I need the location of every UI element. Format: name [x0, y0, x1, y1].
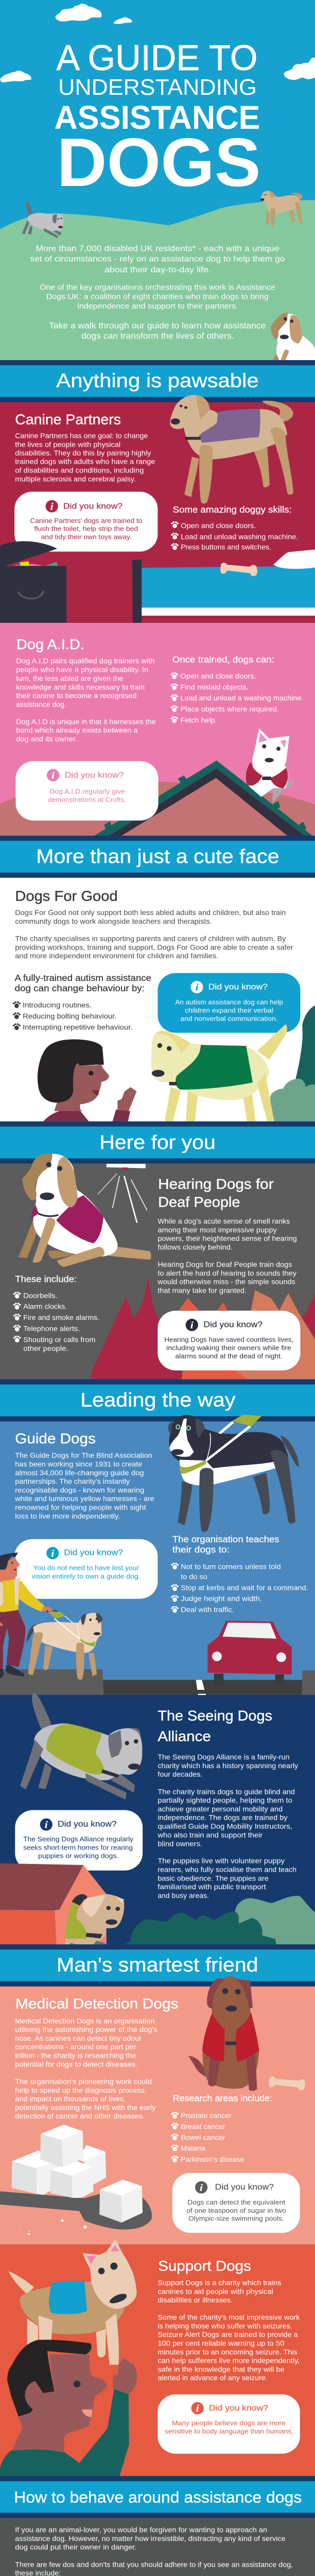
callout: did you know: i [50, 501, 54, 512]
text block: Medical Detection Dogs is an organisation [15, 2018, 155, 2025]
list: research areas: Malaria [181, 2145, 205, 2153]
callout: did you know: Did you know? [208, 982, 268, 991]
callout: did you know: Did you know? [215, 2182, 274, 2192]
text block: partnerships. The charity's instantly [15, 1478, 130, 1486]
callout: did you know: An autism assistance dog can help [175, 998, 283, 1006]
icon: grey dog [22, 202, 64, 238]
text block: recognisable dogs - known for wearing [15, 1487, 144, 1495]
text block: Dogs For Good not only support both less abled adults and children, but also train [15, 909, 286, 917]
callout: did you know: Did you know? [203, 1319, 262, 1329]
callout: did you know: and tidy their own toys away. [41, 533, 132, 540]
text block: concentrations - around one part per [15, 2044, 136, 2051]
title: ASSISTANCE [54, 99, 260, 136]
callout: did you know [14, 1539, 157, 1599]
list: doggy skills: Open and close doors. [181, 522, 256, 530]
text block: The puppies live with volunteer puppy [157, 1858, 285, 1865]
panel: Dogs For Good [0, 878, 315, 1122]
text block: trained dogs with adults who have a range [15, 459, 155, 466]
text block: disabilities or illnesses. [157, 2297, 233, 2304]
text block: independence. The dogs are trained by [157, 1815, 288, 1822]
band: More than just a cute face [0, 836, 315, 878]
icon: toy box [0, 541, 66, 623]
icon: green-vest dog [151, 1024, 287, 1122]
text block: intro: assistance dog. However, no matter how irresistible, distracting any kind of service [15, 2535, 286, 2543]
panel: Support Dogs [0, 2239, 315, 2476]
text block: The Seeing Dogs Alliance is a family-run [157, 1754, 289, 1761]
text block: utilising the astonishing power of the dog's [15, 2026, 157, 2034]
icon: woman with hand raised [0, 2340, 137, 2476]
list: these include [13, 1274, 99, 1353]
text block: renowned for helping people with sight [15, 1504, 147, 1512]
list: behaviour: dog can change behaviour by: [14, 983, 145, 993]
text block: Some of the charity's most impressive work [157, 2314, 300, 2321]
heading: Dog A.I.D. [16, 636, 84, 652]
callout: did you know: Many people believe dogs are more [172, 2419, 286, 2427]
text block: intro: dog could put their owner in danger. [15, 2544, 136, 2551]
callout: did you know: i [51, 770, 55, 781]
callout: did you know: Dog A.I.D regularly give [49, 788, 125, 795]
intro text: Dogs UK: a coalition of eight charities who train dogs to bring [46, 293, 269, 301]
icon: beagle with bandana [19, 1154, 151, 1267]
text block: canines to aid people with physical [157, 2288, 273, 2296]
text block: blind owners. [157, 1840, 202, 1848]
list: these include: Shouting or calls from [23, 1336, 95, 1344]
callout: did you know: and nonverbal communication. [180, 1014, 278, 1022]
callout: did you know: i [196, 2403, 199, 2414]
text block: The charity trains dogs to guide blind and [157, 1788, 295, 1796]
icon: bushes [270, 1006, 315, 1122]
panel: hero [0, 0, 315, 360]
title [54, 38, 261, 200]
band: Here for you: Here for you [99, 1131, 216, 1153]
text block [157, 1754, 299, 1900]
callout: did you know: i [200, 2182, 203, 2193]
band: Man's smartest friend [0, 1944, 315, 1987]
text block: rearers, who fully socialise them and teach [157, 1867, 296, 1874]
callout: did you know: Did you know? [209, 2403, 268, 2413]
text block: Seizure Alert Dogs are trained to provide a [157, 2331, 299, 2339]
panel: Canine Partners [0, 395, 315, 623]
title: A GUIDE TO [56, 38, 257, 78]
heading: The Seeing Dogs [157, 1708, 272, 1724]
text block: of disabilities and conditions, including [15, 467, 144, 474]
text block: follows closely behind. [157, 1244, 233, 1251]
text block: providing workshops, training and support, Dogs For Good are able to create a safer [15, 944, 293, 952]
heading: Medical Detection Dogs [15, 1996, 179, 2012]
intro text [30, 244, 285, 341]
icon: clouds [0, 4, 315, 82]
callout: did you know [14, 492, 157, 552]
panel: Guide Dogs [0, 1415, 315, 1695]
text block: bond which already exists between a [16, 727, 138, 735]
text block: people who have a physical disability. In [16, 667, 148, 674]
callout: did you know: i [190, 1319, 194, 1331]
heading: Alliance [157, 1728, 211, 1744]
heading: Deaf People [158, 1194, 240, 1210]
callout: did you know [157, 1311, 301, 1370]
list: organisation teaches: The organisation teaches [172, 1534, 279, 1544]
panel: Dog A.I.D. [0, 623, 315, 836]
callout: did you know: i [195, 981, 199, 993]
text block [157, 1218, 297, 1295]
title: DOGS [57, 124, 261, 200]
callout: did you know [172, 2173, 300, 2233]
text block: and busy areas. [157, 1892, 209, 1900]
text block: basic obedience. The puppies are [157, 1875, 269, 1883]
text block [157, 2280, 300, 2382]
icon: tan dog [260, 191, 303, 228]
band: Leading the way: Leading the way [80, 1389, 236, 1411]
heading: Hearing Dogs for [158, 1176, 274, 1192]
text block: among their most impressive puppy [157, 1227, 277, 1234]
text block: the lives of people with physical [15, 441, 120, 449]
list: organisation teaches: to do so [181, 1573, 207, 1581]
icon: dog house [94, 760, 312, 836]
band: More than just a cute face: More than just a cute face [36, 845, 279, 867]
intro text: independence and support to their partners. [77, 302, 238, 311]
text block: knowledge and skills necessary to train [16, 684, 145, 691]
text block: The Guide Dogs for The Blind Association [15, 1452, 152, 1460]
panel: Medical Detection Dogs [0, 1976, 315, 2245]
hills [0, 200, 315, 360]
callout: did you know: vision entirely to own a guide dog. [32, 1572, 140, 1580]
text block: almost 34,000 life-changing guide dog [15, 1469, 144, 1477]
band: Here for you [0, 1122, 315, 1164]
icon: woman [38, 1039, 136, 1122]
callout: did you know: Did you know? [64, 1548, 123, 1557]
text block: and more independent environment for children and families. [15, 953, 218, 960]
text block: to alert the hard of hearing to sounds they [157, 1270, 297, 1278]
text block: multiple sclerosis and cerebral palsy. [15, 476, 136, 483]
icon: bone [269, 2077, 305, 2090]
text block: who also train and support their [157, 1832, 262, 1839]
list: organisation teaches: Judge height and width. [181, 1596, 262, 1603]
panel: Hearing Dogs [0, 1154, 315, 1379]
text block: familiarised with public transport [157, 1884, 267, 1891]
callout: did you know: puppies or working dogs. [38, 1852, 118, 1859]
text block: can help sufferers live more independently, [157, 2358, 300, 2365]
list: once trained: Once trained, dogs can: [172, 654, 274, 665]
text block: turn, the less abled are given the [16, 675, 123, 683]
text block: and impact on thousands of lives, [15, 2096, 126, 2103]
panel: how to behave [0, 2518, 315, 2576]
list: research areas: Prostate cancer [181, 2112, 232, 2120]
callout: did you know: sensitive to body language than humans. [165, 2428, 293, 2435]
list: doggy skills [171, 504, 298, 551]
heading: Canine Partners [15, 412, 121, 428]
list: behaviour [13, 973, 151, 1031]
list: behaviour: Interrupting repetitive behaviour. [23, 1024, 133, 1031]
list: once trained: Open and close doors. [180, 673, 256, 681]
text block: partially sighted people, helping them to [157, 1797, 292, 1805]
text block: powers, their heightened sense of hearing [157, 1235, 297, 1243]
icon: smoke alarm [98, 1164, 147, 1223]
callout: did you know: including waking their owners while fire [166, 1344, 291, 1351]
text block: would otherwise miss - the simple sounds [157, 1279, 295, 1286]
text block: safe in the knowledge that they will be [157, 2366, 285, 2374]
callout: did you know: Canine Partners' dogs are trained to [30, 517, 142, 524]
list: research areas [171, 2093, 272, 2164]
heading: Support Dogs [158, 2258, 251, 2274]
callout: did you know [15, 1810, 143, 1871]
icon: grey dog in green vest [20, 1693, 142, 1800]
icon: beagle peeking [271, 313, 315, 360]
text block: help to speed up the diagnosis process [15, 2087, 145, 2095]
icon: white terrier on roof [246, 728, 295, 803]
intro text: set of circumstances - rely on an assistance dog to help them go [30, 254, 285, 263]
callout: did you know: seeks short-term homes for rearing [23, 1844, 133, 1851]
text block: dog and its owner. [16, 736, 77, 743]
band: Man's smartest friend: Man's smartest friend [57, 1954, 258, 1976]
text block [15, 2018, 157, 2121]
band: Anything is pawsable [0, 360, 315, 402]
list: once trained: Find mislaid objects. [180, 684, 249, 691]
icon: bushes [125, 1896, 315, 1944]
text block: community dogs to work alongside teachers and therapists. [15, 918, 212, 926]
text block: intro [15, 2527, 293, 2576]
callout: did you know: The Seeing Dogs Alliance regularly [23, 1835, 134, 1843]
text block: intro: If you are an animal-lover, you would be forgiven for wanting to approach an [15, 2527, 267, 2534]
band: Anything is pawsable: Anything is pawsable [56, 370, 259, 392]
text block: The charity specialises in supporting parents and carers of children with autism. By [15, 935, 286, 943]
callout: did you know: Did you know? [58, 1819, 117, 1828]
list: research areas: Research areas include: [173, 2093, 272, 2103]
icon: flames [91, 1277, 315, 1379]
icon: bed and bone [132, 550, 315, 623]
list: these include: other people. [23, 1345, 68, 1353]
heading [158, 1176, 274, 1210]
list: organisation teaches [171, 1534, 308, 1614]
icon: man head [0, 1552, 20, 1582]
list: these include: Fire and smoke alarms. [23, 1314, 99, 1322]
list: these include: Doorbells. [23, 1292, 58, 1300]
text block [15, 909, 293, 960]
text block: loss to live more independently. [15, 1513, 120, 1520]
callout: did you know: Dogs can detect the equivalent [187, 2198, 285, 2206]
callout: did you know: of one teaspoon of sugar in two [186, 2207, 286, 2214]
panel: The Seeing Dogs Alliance [0, 1693, 315, 1950]
list: organisation teaches: their dogs to: [172, 1545, 230, 1554]
intro text: about their day-to-day life. [104, 265, 211, 274]
list: research areas: Parkinson's disease [181, 2156, 244, 2164]
list: organisation teaches: Deal with traffic. [181, 1606, 234, 1614]
text block: nose. As canines can detect tiny odour [15, 2035, 142, 2043]
icon: red car [207, 1621, 292, 1686]
text block: qualified Guide Dog Mobility Instructors, [157, 1823, 292, 1831]
list: once trained: Place objects where required. [180, 706, 279, 714]
list: once trained: Load and unload a washing machine. [180, 695, 303, 702]
text block: potential for dogs to detect diseases. [15, 2061, 137, 2069]
callout: did you know: children expand their verbal [185, 1006, 273, 1014]
text block: Dog A.I.D pairs qualified dog trainers with [16, 658, 155, 665]
icon: canine partner dog [170, 395, 293, 504]
text block: is helping those who suffer with seizures. [157, 2323, 292, 2330]
list: these include: Telephone alerts. [23, 1325, 80, 1333]
icon: kennel with dog [0, 1863, 124, 1944]
band: How to behave around assistance dogs [0, 2476, 315, 2518]
title: UNDERSTANDING [58, 75, 257, 100]
list: these include: Alarm clocks. [23, 1303, 67, 1311]
list: doggy skills: Press buttons and switches. [181, 544, 271, 551]
callout: did you know [15, 761, 159, 821]
callout: did you know [157, 973, 301, 1033]
text block: The organisation's pioneering work could [15, 2078, 152, 2086]
text block: Dog A.I.D is unique in that it harnesses the [16, 718, 155, 726]
text block: that many take for granted. [157, 1287, 247, 1295]
text block: disabilities. They do this by pairing highly [15, 450, 151, 457]
text block: 100 per cent reliable warning up to 50 [157, 2340, 284, 2348]
list: these include: These include: [15, 1274, 77, 1284]
text block: achieve greater personal mobility and [157, 1806, 283, 1814]
list: organisation teaches: Not to turn corners unless told [181, 1564, 281, 1571]
callout: did you know: demonstrations at Crufts. [48, 796, 126, 803]
intro text: One of the key organisations orchestrating this work is Assistance [40, 283, 275, 292]
icon: guide dog in harness [168, 1415, 299, 1532]
callout: did you know: i [51, 1548, 55, 1559]
text block: potentially assisting the NHS with the early [15, 2104, 156, 2112]
list: research areas: Breast cancer [181, 2123, 225, 2131]
heading: Guide Dogs [15, 1431, 96, 1447]
text block: Canine Partners has one goal: to change [15, 433, 148, 440]
text block [15, 433, 155, 483]
callout: did you know: You do not need to have lost your [33, 1564, 139, 1571]
icon: labrador guide dog [26, 1611, 102, 1680]
callout: did you know [157, 2394, 300, 2454]
text block: Support Dogs is a charity which trains [157, 2280, 281, 2287]
text block: has been working since 1931 to create [15, 1461, 142, 1468]
list: behaviour: Reducing bolting behaviour. [23, 1013, 116, 1021]
text block: charity which has a history spanning nearly [157, 1762, 299, 1770]
icon: sugar cubes on spoon [0, 2125, 152, 2235]
list: behaviour: Introducing routines. [23, 1002, 92, 1009]
callout: did you know: flush the toilet, help strip the bed [34, 525, 138, 532]
callout: did you know: Olympic-size swimming pools. [188, 2215, 284, 2222]
text block: alerted in advance of any seizure. [157, 2375, 268, 2382]
heading [157, 1708, 272, 1744]
list: behaviour: A fully-trained autism assistance [14, 973, 151, 983]
text block: While a dog's acute sense of smell ranks [157, 1218, 290, 1226]
list: research areas: Bowel cancer [181, 2134, 225, 2142]
callout: did you know: i [45, 1819, 48, 1831]
icon: support dog [8, 2239, 136, 2365]
list: doggy skills: Load and unload washing machine. [181, 534, 298, 541]
list: once trained: Fetch help. [180, 717, 217, 724]
text block: minutes prior to an oncoming seizure. This [157, 2349, 297, 2357]
ground hump [0, 782, 315, 836]
text block: their canine to become a recognised [16, 692, 136, 700]
list: doggy skills: Some amazing doggy skills: [173, 504, 292, 515]
text block: assistance dog. [16, 701, 66, 709]
text block [16, 658, 155, 743]
callout: did you know: Did you know? [63, 501, 122, 511]
intro text: dogs can transform the lives of others. [81, 331, 234, 341]
band: Leading the way [0, 1379, 315, 1421]
text block: four decades. [157, 1771, 202, 1778]
intro text: Take a walk through our guide to learn how assistance [49, 321, 266, 330]
text block: detection of cancer and other diseases. [15, 2113, 145, 2121]
icon: brown dog in red vest [188, 1976, 259, 2091]
icon: road and kerbs [0, 1669, 315, 1695]
heading: Dogs For Good [15, 888, 118, 904]
callout: did you know: Did you know? [65, 770, 124, 779]
callout: did you know: Hearing Dogs have saved countless lives, [164, 1336, 293, 1343]
text block: Hearing Dogs for Deaf People train dogs [157, 1261, 292, 1269]
text block: white and luminous yellow harnesses - are [14, 1496, 154, 1503]
text block [14, 1452, 154, 1520]
icon: man with guide dog [0, 1578, 53, 1679]
callout: did you know: alarms sound at the dead of night. [175, 1352, 283, 1360]
text block: trillion - the charity is researching the [15, 2053, 136, 2060]
intro text: More than 7,000 disabled UK residents* - each with a unique [36, 244, 279, 253]
list: once trained [170, 654, 303, 724]
